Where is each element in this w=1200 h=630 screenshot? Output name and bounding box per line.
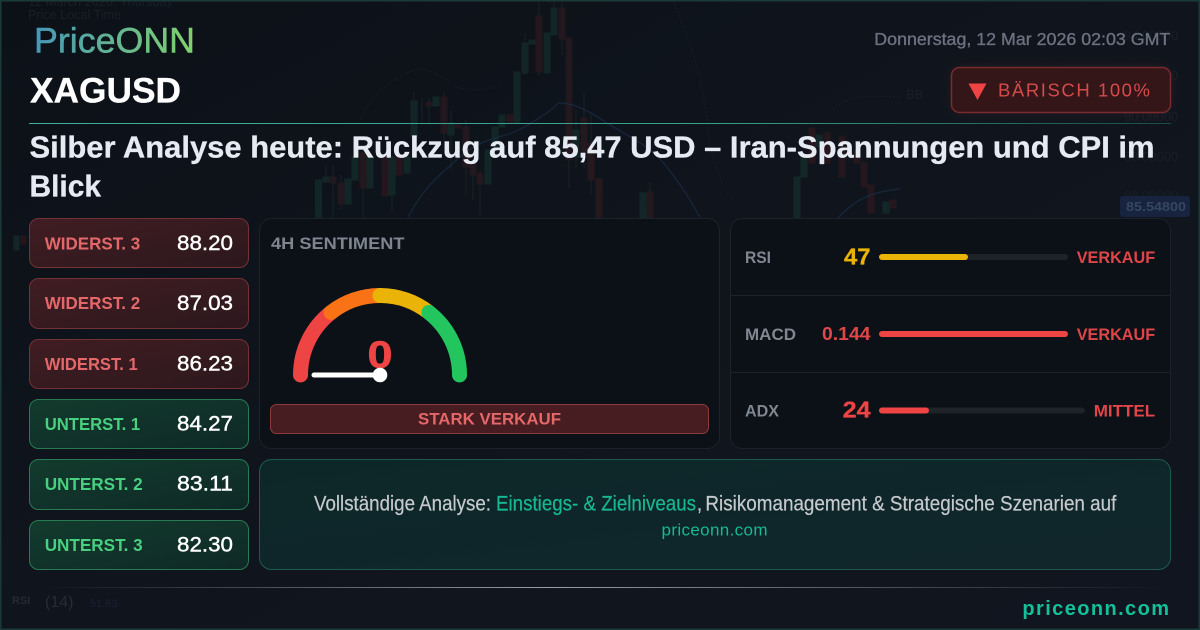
RSI row: VERKAUF [1077,248,1155,267]
signal label [270,404,708,434]
resistance 3 [30,218,248,268]
support 1 [30,400,248,448]
sentiment badge [952,68,1170,112]
ADX row [745,396,1155,422]
ADX row: ADX [745,401,780,420]
resistance 2: WIDERST. 2 [45,293,140,313]
headline: Blick [30,170,101,204]
support 3: UNTERST. 3 [45,535,143,555]
resistance 1 [30,340,248,388]
call to action text: Einstiegs- & Zielniveaus [496,492,696,516]
MACD row: VERKAUF [1077,325,1155,344]
headline: Silber Analyse heute: Rückzug auf 85,47 USD – Iran-Spannungen und CPI im [30,130,1154,164]
panel: price levels [30,218,248,570]
support 2 [30,460,248,510]
support 2: UNTERST. 2 [45,474,143,494]
support 3 [30,520,248,570]
sentiment badge: BÄRISCH 100% [998,80,1150,101]
support 2: 83.11 [177,471,233,495]
MACD row [745,323,1155,344]
signal label: STARK VERKAUF [418,410,561,428]
header divider [29,123,1171,124]
background bollinger bands [360,0,900,218]
support 1: 84.27 [177,411,233,435]
gauge needle [314,368,387,382]
call to action text [314,492,1116,516]
current price tag [1120,196,1190,217]
sentiment heading: 4H SENTIMENT [271,234,405,253]
RSI row: RSI [745,248,771,267]
call to action text: , [696,492,702,516]
background axis labels: 88.00000 [1124,149,1178,164]
date: Donnerstag, 12 Mar 2026 02:03 GMT [874,29,1171,49]
support 1: UNTERST. 1 [45,414,140,434]
panel: call to action [260,460,1170,570]
resistance 3: 88.20 [177,231,233,255]
call to action text: Vollständige Analyse: [314,492,491,516]
background candlestick chart [14,0,896,250]
background axis labels: Price Local Time [28,7,121,22]
headline [30,130,1154,204]
background axis labels: (14) [45,594,73,611]
gauge [300,296,460,375]
resistance 2: 87.03 [177,291,233,315]
footer divider [40,587,1170,588]
footer url: priceonn.com [1022,598,1169,620]
logo: PriceONN [34,22,195,60]
panel: 4H sentiment [260,218,720,448]
call to action text: Risikomanagement & Strategische Szenarien auf [705,492,1116,516]
background axis labels: 90.00000 [1124,109,1178,124]
ticker symbol: XAGUSD [30,72,181,111]
current price tag: 85.54800 [1126,199,1186,214]
resistance 1: 86.23 [177,352,233,376]
resistance 2 [30,278,248,328]
gauge value: 0 [368,334,392,376]
ADX row: 24 [843,396,871,422]
background axis labels: 86.00000 [1124,188,1178,203]
resistance 1: WIDERST. 1 [45,354,138,374]
resistance 3: WIDERST. 3 [45,233,140,253]
panel: indicators [730,218,1170,448]
background axis labels: 94.00000 [1124,28,1178,43]
support 3: 82.30 [177,532,233,556]
call to action link: priceonn.com [662,521,768,540]
background axis labels: BB [906,87,923,102]
background axis labels: 51.63 [90,598,118,610]
background axis labels: RSI [12,595,30,607]
RSI row: 47 [844,243,870,269]
MACD row: MACD [745,325,796,344]
MACD row: 0.144 [822,323,871,344]
background axis labels: 92.00000 [1124,68,1178,83]
ADX row: MITTEL [1094,401,1155,420]
RSI row [745,243,1155,269]
